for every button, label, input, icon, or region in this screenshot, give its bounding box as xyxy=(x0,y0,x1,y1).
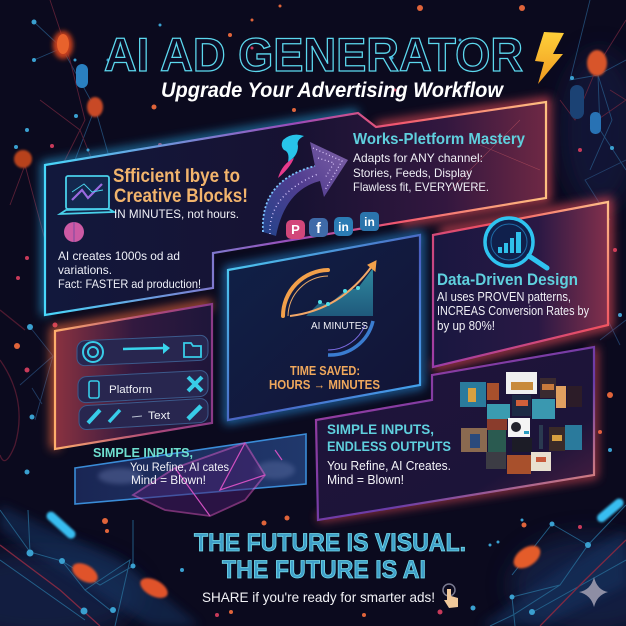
heading: simple inputs: SIMPLE INPUTS, xyxy=(93,445,193,460)
row: platform xyxy=(78,370,208,403)
bottom right network band xyxy=(480,505,626,626)
network lines top left xyxy=(0,0,146,461)
heading: endless outputs: ENDLESS OUTPUTS xyxy=(327,438,451,454)
text: you refine ai creates: You Refine, AI Creates. xyxy=(327,459,451,473)
icons: social media: in xyxy=(338,220,349,234)
panel: simple inputs strip xyxy=(75,434,306,516)
call to action: SHARE if you're ready for smarter ads! xyxy=(202,589,435,605)
bottom left network band xyxy=(0,505,200,626)
heading: creative blocks: Creative Blocks! xyxy=(114,186,248,207)
icons: social media: P xyxy=(291,222,300,237)
text: time saved: TIME SAVED: xyxy=(290,364,360,378)
text: ai creates variations: variations. xyxy=(58,263,112,277)
text: you refine: Mind = Blown! xyxy=(131,475,206,487)
icon: pointing hand xyxy=(443,584,458,608)
heading: data-driven design: Data-Driven Design xyxy=(437,270,578,289)
text: minutes not hours: IN MINUTES, not hours. xyxy=(114,207,239,221)
text: adapts for any channel: Adapts for ANY channel: xyxy=(353,151,483,165)
heading: works-platform mastery: Works-Pletform Mastery xyxy=(353,131,525,148)
network lines top right xyxy=(560,0,626,345)
text: proven patterns: AI uses PROVEN patterns, xyxy=(437,290,571,304)
text: time saved: HOURS → MINUTES xyxy=(269,378,380,392)
panel: input controls xyxy=(55,304,212,449)
text: you refine: You Refine, AI cates xyxy=(130,462,229,474)
row: text xyxy=(79,398,208,430)
icon: lightning bolt xyxy=(535,32,564,84)
icon: magnifier with bars xyxy=(485,218,547,268)
panel: works-platform and creative blocks xyxy=(45,102,546,315)
text: proven patterns: INCREAS Conversion Rates by xyxy=(437,304,590,318)
panel: data-driven design xyxy=(433,202,608,367)
heading: endless outputs: SIMPLE INPUTS, xyxy=(327,421,434,437)
text: proven patterns: by up 80%! xyxy=(437,319,495,333)
title: AI AD GENERATOR xyxy=(104,28,523,81)
icon: laptop xyxy=(60,176,114,214)
heading: creative blocks: Sfficient Ibye to xyxy=(113,166,240,187)
text: ai creates variations: Fact: FASTER ad production! xyxy=(58,277,201,291)
icon: brain xyxy=(64,222,84,242)
graphic: ad collage xyxy=(460,372,582,474)
icons: social media xyxy=(286,212,379,239)
icons: social media: f xyxy=(316,220,322,237)
row: target to folder xyxy=(77,335,208,366)
row: platform: Platform xyxy=(109,384,152,396)
closing heading: THE FUTURE IS AI xyxy=(222,556,426,584)
icon: sparkling arrow xyxy=(263,142,348,236)
text: you refine ai creates: Mind = Blown! xyxy=(327,473,404,487)
panel: time saved chart xyxy=(228,235,420,420)
text: adapts for any channel: Flawless fit, EVERYWERE. xyxy=(353,180,489,194)
icons: social media: in xyxy=(364,215,375,229)
panel glows xyxy=(45,102,608,518)
text: ai creates variations: AI creates 1000s od ad xyxy=(58,249,180,263)
panel: endless outputs xyxy=(316,347,594,520)
text: adapts for any channel: Stories, Feeds, Display xyxy=(353,166,472,180)
label: ai minutes: AI MINUTES xyxy=(311,320,368,332)
row: text: Text xyxy=(148,410,170,422)
closing heading: THE FUTURE IS VISUAL. xyxy=(194,529,466,557)
icon: brand swoosh xyxy=(278,135,304,178)
graphic: particle crystal xyxy=(98,443,295,516)
chart: gauge and growth curve xyxy=(283,261,376,355)
icon: sparkle watermark xyxy=(579,577,608,607)
subtitle: Upgrade Your Advertising Workflow xyxy=(161,79,505,102)
